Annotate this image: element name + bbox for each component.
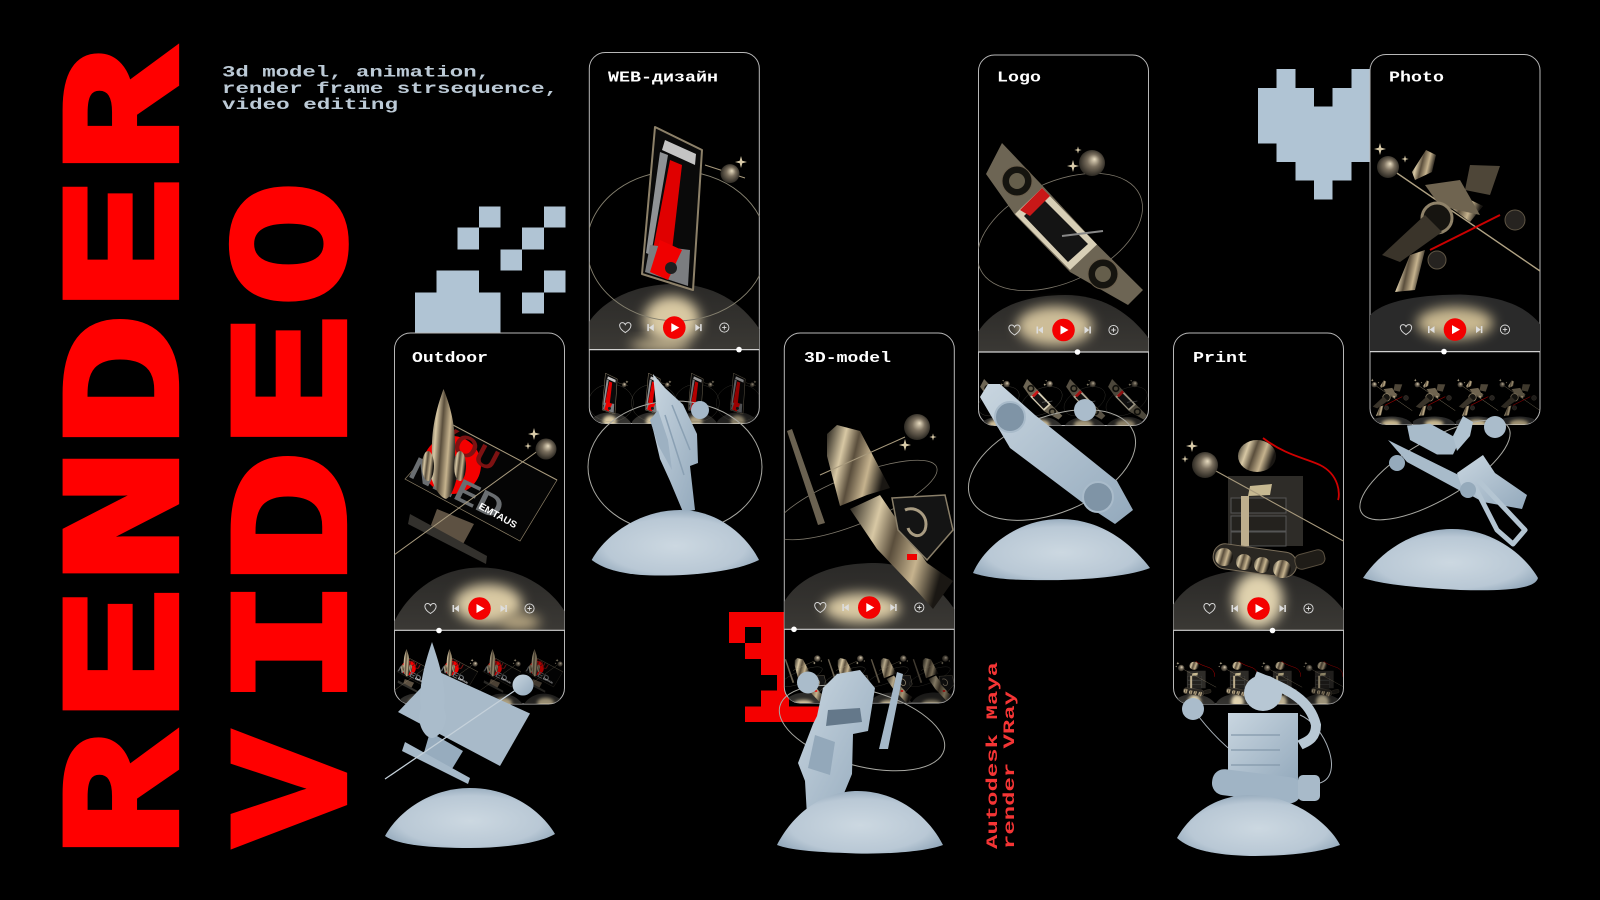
text block: software credits: Autodesk Maya	[984, 661, 1002, 849]
thumbnails	[1175, 661, 1344, 704]
icon: red pixel glyph	[729, 612, 825, 722]
title: VIDEO: E	[206, 314, 395, 448]
title: RENDER: R	[38, 50, 227, 173]
clay model: printer	[1182, 675, 1331, 805]
timeline marker	[736, 347, 742, 352]
text block: software credits	[984, 661, 1019, 849]
render: rocket poster: YOU	[429, 417, 504, 478]
clay model: spacecraft	[770, 669, 954, 820]
panel: Print	[1173, 333, 1345, 856]
title: VIDEO: I	[206, 580, 395, 704]
title: RENDER: E	[38, 588, 227, 721]
card title: Logo	[997, 70, 1041, 86]
thumbnails	[978, 379, 1148, 426]
card title: Outdoor	[412, 350, 488, 367]
clay model: rocket poster	[385, 642, 534, 784]
panel: WEB-дизайн	[587, 52, 767, 576]
clay dome	[777, 791, 943, 854]
render: rocket poster: NEED	[404, 450, 510, 526]
text block: services description: video editing	[222, 96, 398, 114]
thumbnails	[394, 649, 563, 704]
card frame	[784, 333, 954, 703]
media controls	[1204, 597, 1313, 620]
title: VIDEO: D	[206, 452, 395, 584]
timeline marker	[436, 628, 442, 633]
media controls	[425, 597, 534, 620]
timeline marker	[1441, 349, 1447, 354]
clay dome	[973, 519, 1150, 580]
clay dome	[1363, 529, 1538, 590]
text block: services description	[222, 64, 558, 114]
card title: 3D-model	[804, 350, 891, 367]
clay dome	[592, 510, 759, 576]
icon: pixel cubes and mound	[415, 206, 565, 334]
panel: 3D-model	[764, 333, 955, 854]
card title: Photo	[1389, 70, 1444, 86]
media controls	[1400, 318, 1510, 341]
render: tracked printer	[1173, 438, 1345, 632]
title: VIDEO: O	[206, 183, 395, 305]
title: RENDER: R	[38, 734, 227, 857]
media controls	[620, 316, 729, 339]
card title: WEB-дизайн	[608, 70, 718, 86]
timeline divider	[394, 629, 564, 631]
render: phone	[587, 127, 767, 352]
panel: Outdoor	[385, 333, 565, 848]
timeline divider	[978, 351, 1148, 353]
title: RENDER: E	[38, 177, 227, 310]
timeline divider	[1174, 629, 1344, 631]
render: metal spacecraft	[784, 414, 954, 630]
panel: Logo	[968, 54, 1150, 580]
clay dome	[385, 788, 555, 848]
clay model: camera assembly	[1346, 402, 1527, 544]
title: RENDER: N	[38, 448, 227, 584]
text block: software credits: render VRay	[1001, 690, 1019, 849]
thumbnails	[1370, 378, 1540, 424]
text block: services description: render frame strsequence,	[222, 80, 558, 98]
clay model: phone	[588, 374, 762, 533]
media controls	[1009, 319, 1118, 341]
panel: Photo	[1346, 54, 1541, 590]
card frame	[394, 333, 564, 704]
timeline marker	[1270, 628, 1275, 633]
timeline divider	[589, 349, 759, 351]
title: VIDEO: V	[206, 733, 395, 845]
card frame	[1370, 54, 1540, 424]
timeline marker	[1075, 349, 1080, 355]
card frame	[589, 52, 759, 424]
card frame	[978, 55, 1148, 426]
timeline marker	[791, 626, 797, 632]
card title: Print	[1193, 350, 1248, 367]
thumbnails	[784, 655, 954, 703]
render: plate with logo	[978, 143, 1148, 352]
clay model: plate	[952, 384, 1152, 542]
timeline divider	[1370, 351, 1540, 353]
icon: pixel heart	[1258, 69, 1370, 199]
media controls	[815, 596, 924, 619]
title: RENDER: D	[38, 314, 227, 448]
card frame	[1174, 333, 1344, 704]
render: rocket poster	[394, 389, 565, 632]
timeline divider	[784, 628, 954, 630]
thumbnails	[589, 373, 760, 424]
render: camera assembly	[1370, 143, 1541, 354]
render: rocket poster: EMTAUS	[477, 501, 519, 531]
text block: services description: 3d model, animation,	[222, 64, 490, 82]
clay dome	[1177, 795, 1340, 856]
